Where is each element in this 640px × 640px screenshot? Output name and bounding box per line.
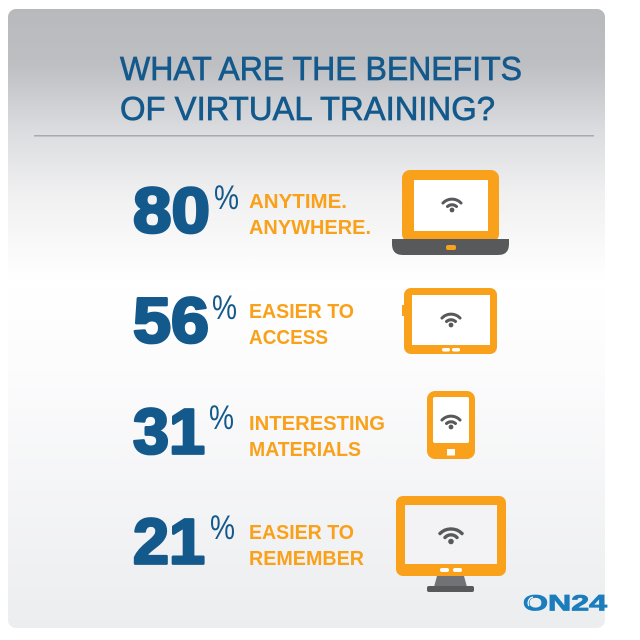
row: 80% anytime anywhere <box>133 170 509 255</box>
stat: 80%: % <box>214 179 239 217</box>
label: easier to remember <box>249 522 365 570</box>
stat: 21%: % <box>210 509 235 547</box>
icon: desktop monitor <box>396 496 506 592</box>
icon: tablet <box>402 288 497 354</box>
stat: 56% <box>133 284 237 356</box>
stat: 80%: 80 <box>133 174 210 246</box>
label: easier to access <box>249 301 354 349</box>
logo: ON24: ON24 <box>523 590 608 616</box>
label: interesting materials <box>249 413 385 461</box>
logo: ON24 <box>523 590 608 616</box>
label: anytime anywhere <box>249 191 371 239</box>
stat: 31%: 31 <box>133 396 205 468</box>
icon: laptop <box>392 170 509 255</box>
title <box>120 50 522 127</box>
stat: 56%: 56 <box>133 284 209 356</box>
stat: 80% <box>133 174 239 246</box>
row: 31% interesting materials <box>133 391 475 468</box>
label: easier to access: ACCESS <box>249 327 328 349</box>
stat: 56%: % <box>212 289 237 327</box>
row: 56% easier to access <box>133 284 497 356</box>
label: anytime anywhere: ANYWHERE. <box>249 217 371 239</box>
stat: 21%: 21 <box>133 506 205 578</box>
label: easier to remember: EASIER TO <box>249 522 354 544</box>
title: OF VIRTUAL TRAINING? <box>120 90 495 127</box>
label: interesting materials: INTERESTING <box>249 413 385 435</box>
stat: 31%: % <box>209 399 234 437</box>
label: interesting materials: MATERIALS <box>249 439 361 461</box>
icon: smartphone <box>427 391 475 459</box>
label: easier to access: EASIER TO <box>249 301 354 323</box>
title: WHAT ARE THE BENEFITS <box>120 50 522 87</box>
stat: 21% <box>133 506 235 578</box>
row: 21% easier to remember <box>133 496 506 592</box>
label: easier to remember: REMEMBER <box>249 548 365 570</box>
label: anytime anywhere: ANYTIME. <box>249 191 347 213</box>
